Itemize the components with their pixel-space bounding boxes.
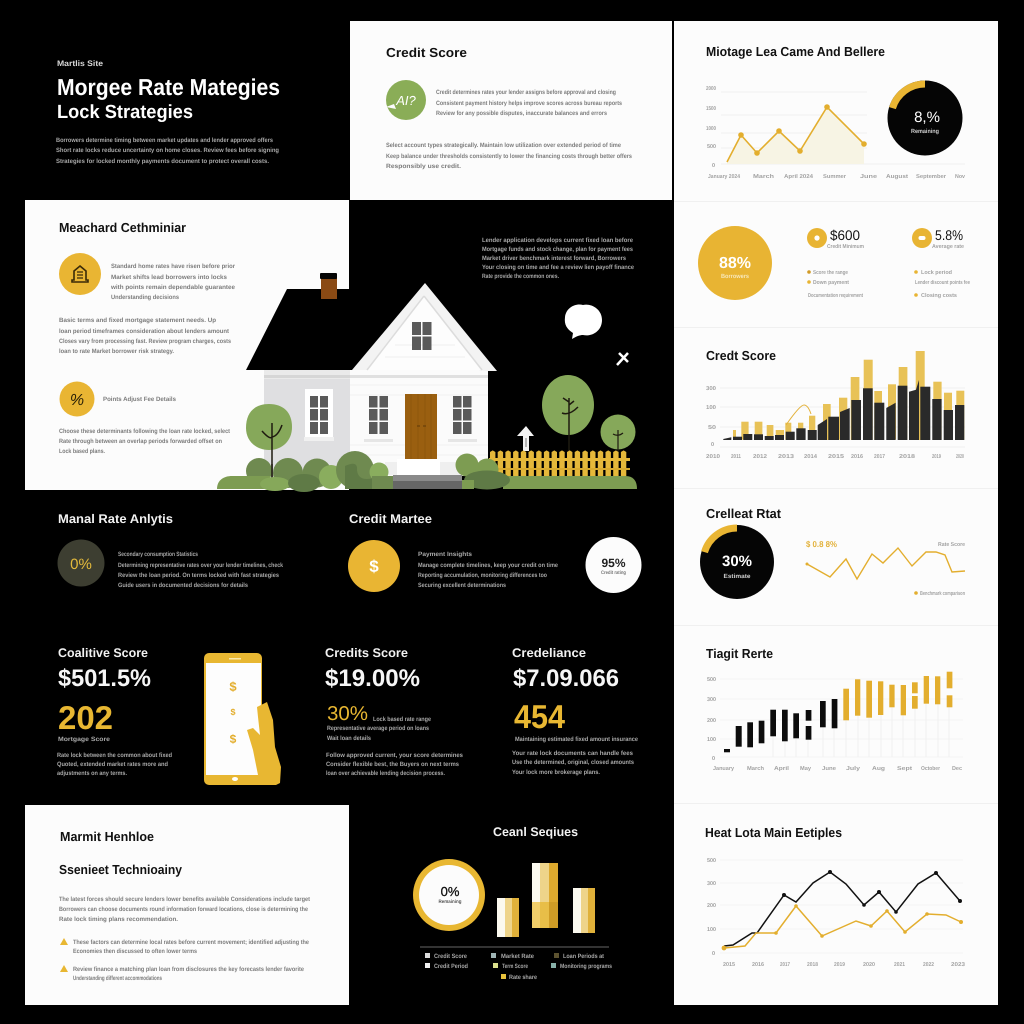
- heading: credit score: Credit Score: [386, 45, 467, 60]
- roof: black main: [246, 283, 425, 370]
- steps: [385, 459, 462, 489]
- section: manual rate analysis: Manal Rate Anlytis: [58, 512, 173, 526]
- stat column: coalitive score: 202: [58, 699, 113, 736]
- stat column: credeliance: [512, 646, 638, 776]
- section: credit segments: [413, 825, 612, 981]
- text block: percent paragraph: Choose these determinants following the loan rate locked, select: [59, 428, 230, 435]
- title block: [56, 59, 280, 165]
- text block: credit matters: Payment Insights: [418, 551, 473, 558]
- line chart: two series: 2018: [807, 962, 818, 968]
- section: credit segments: Ceanl Seqiues: [493, 825, 578, 839]
- text block: mechanics intro: Standard home rates have risen before prior: [111, 263, 236, 270]
- text: percent caption: Points Adjust Fee Details: [103, 396, 177, 403]
- kpi: 5.8 percent stat: 5.8%: [935, 227, 963, 243]
- icon: green badge: AI?: [395, 93, 417, 108]
- text block: mechanics intro: with points remain dependable guarantee: [110, 284, 236, 291]
- stat: white circle: [586, 537, 642, 593]
- line chart: rates: January 2024: [708, 174, 741, 180]
- line chart: two series: 2021: [894, 962, 905, 968]
- stat column: credeliance: Maintaining estimated fixed amount insurance: [515, 736, 638, 743]
- title block: Strategies for locked monthly payments document to protect overall costs.: [56, 158, 269, 165]
- stat column: credits score: loan over achievable lending decision process.: [326, 770, 445, 777]
- bullet: warning two: Review finance a matching plan loan from disclosures the key forecasts lender favorite: [73, 966, 304, 973]
- section: credit matters: [348, 512, 642, 593]
- legend: Credit Period: [434, 963, 468, 970]
- icon: small plane: [617, 353, 628, 365]
- door: [405, 394, 437, 459]
- text block: mechanics intro: [110, 263, 236, 301]
- tree: right large: [542, 375, 594, 452]
- line chart: rates: September: [916, 173, 947, 180]
- stat: white circle: 95%: [601, 556, 626, 570]
- line chart: rates: 1500: [706, 106, 716, 112]
- legend: Monitoring programs: [560, 963, 612, 970]
- title block: Martlis Site: [57, 59, 104, 68]
- kpi: 5.8 percent stat: Lender discount points fee: [915, 279, 970, 286]
- title block: Lock Strategies: [57, 102, 193, 123]
- icon: percent badge: %: [70, 392, 84, 409]
- bar chart: credit score: 300: [706, 386, 716, 392]
- stat column: credeliance: Your lock more brokerage plans.: [512, 769, 600, 776]
- bullet: warning one: [60, 938, 309, 955]
- text block: mechanics intro: Market shifts lead borrowers into locks: [111, 274, 228, 281]
- floating bar chart: target rate: March: [747, 765, 765, 772]
- text block: analysis: Guide users in documented decisions for details: [118, 582, 248, 589]
- bar chart: credit score: 50: [708, 425, 716, 431]
- floating bar chart: target rate: Dec: [952, 766, 962, 772]
- kpi: 5.8 percent stat: Average rate: [932, 244, 964, 250]
- bar chart: credit score: 100: [706, 405, 716, 411]
- heading: lending chart: Heat Lota Main Eetiples: [705, 825, 842, 840]
- ring: percent: Remaining: [438, 899, 462, 905]
- line chart: two series: 2022: [923, 962, 934, 968]
- floating bar chart: target rate: July: [846, 765, 861, 772]
- donut: credit rate: Estimate: [724, 573, 751, 580]
- bar chart: credit score: 0: [711, 442, 714, 448]
- illustration: house: [217, 273, 637, 492]
- line chart: rates: August: [886, 174, 908, 180]
- window: front left: [364, 396, 393, 442]
- bar chart: credit score: 2013: [778, 454, 794, 460]
- text block: credit detail: [386, 142, 632, 170]
- stat column: credeliance: Use the determined, original, closed amounts: [512, 759, 635, 766]
- heading: technology: Ssenieet Technioainy: [59, 862, 183, 877]
- heading: credit rate: Crelleat Rtat: [706, 506, 782, 521]
- section: credit matters: Credit Martee: [349, 512, 432, 526]
- floating bar chart: target rate: Aug: [872, 766, 886, 772]
- line chart: rates: Summer: [823, 174, 847, 180]
- bar chart: credit score: 2015: [828, 454, 844, 460]
- text block: mechanics paragraph: Closes vary from processing fast. Review program charges, costs: [59, 338, 231, 345]
- text block: house caption: Rate provide the common ones.: [482, 273, 559, 280]
- gable: [352, 283, 497, 371]
- donut: rate share: 8,%: [914, 109, 940, 126]
- stat column: credits score: Representative average period on loans: [327, 725, 429, 732]
- donut: rate share: [888, 80, 962, 156]
- line chart: two series: 0: [712, 951, 715, 957]
- title block: Borrowers determine timing between market updates and lender approved offers: [56, 137, 274, 144]
- floating bar chart: target rate: 300: [707, 697, 716, 703]
- line chart: rates: 0: [712, 163, 715, 169]
- text block: house caption: Market driver benchmark interest forward, Borrowers: [482, 255, 627, 262]
- legend: Credit Score: [434, 953, 467, 960]
- line chart: two series: 500: [707, 858, 716, 864]
- floating bar chart: target rate: [707, 672, 963, 772]
- stat column: coalitive score: adjustments on any terms.: [57, 770, 127, 777]
- title block: Short rate locks reduce uncertainty on home closes. Review fees before signing: [56, 147, 279, 154]
- stat column: coalitive score: Mortgage Score: [58, 736, 111, 743]
- text block: house caption: [482, 237, 634, 280]
- chimney: [320, 273, 337, 299]
- bullet: warning two: Understanding different accommodations: [73, 975, 162, 982]
- panel: right column: [674, 21, 998, 1005]
- panel: credit score top: [350, 21, 672, 200]
- line chart: rates: April 2024: [784, 173, 814, 180]
- legend: Market Rate: [501, 953, 535, 960]
- kpi: 600 stat: $600: [830, 227, 860, 243]
- icon: phone with hand: [204, 653, 281, 785]
- text block: credit detail: Keep balance under thresholds consistently to lower the financing costs through better offers: [386, 153, 632, 160]
- bar chart: credit score: 2010: [706, 454, 720, 460]
- kpi: 600 stat: Documentation requirement: [808, 292, 863, 299]
- heading: market: Marmit Henhloe: [60, 829, 154, 844]
- window: front right: [448, 396, 477, 442]
- wall: grey wing: [264, 370, 351, 476]
- stat column: credits score: Consider flexible best, the Buyers on next terms: [326, 761, 460, 768]
- text block: mechanics intro: Understanding decisions: [111, 294, 180, 301]
- kpi: large yellow circle: Borrowers: [721, 273, 750, 280]
- stat column: credits score: Wait loan details: [327, 735, 372, 742]
- title block: Morgee Rate Mategies: [57, 74, 280, 100]
- stat column: credeliance: 454: [514, 698, 566, 735]
- icon: green badge: [386, 80, 426, 120]
- text block: analysis: Review the loan period. On terms locked with fast strategies: [118, 572, 280, 579]
- text block: analysis: Determining representative rates over your lender timelines, check: [118, 562, 283, 569]
- bar chart: credit score: 2016: [851, 454, 863, 460]
- kpi: large yellow circle: [698, 226, 772, 300]
- floating bar chart: target rate: 500: [707, 677, 716, 683]
- icon: phone with hand: $: [230, 707, 236, 717]
- floating bar chart: target rate: April: [774, 765, 790, 772]
- bar: medium: [573, 888, 595, 933]
- legend: Term Score: [502, 963, 528, 970]
- line chart: rates: [706, 86, 966, 180]
- heading: credit score chart: Credt Score: [706, 348, 776, 363]
- section: manual rate analysis: [58, 512, 283, 589]
- line chart: rates: June: [860, 174, 877, 180]
- floating bar chart: target rate: May: [800, 766, 812, 772]
- icon: dark percent circle: [58, 540, 104, 586]
- text block: mechanics paragraph: [59, 317, 231, 355]
- stat column: credeliance: Credeliance: [512, 646, 586, 660]
- kpi: 600 stat: [807, 227, 864, 299]
- line chart: rates: 500: [707, 144, 716, 150]
- text block: percent paragraph: [59, 428, 230, 455]
- floating bar chart: target rate: January: [713, 766, 735, 772]
- stat: white circle: Credit rating: [601, 570, 626, 576]
- text block: credit matters: Securing excellent determinations: [418, 582, 506, 589]
- icon: dollar circle: $: [369, 557, 379, 576]
- bullet: warning two: [60, 965, 304, 982]
- bar chart: credit score: [706, 351, 965, 460]
- bar chart: credit score: 2017: [874, 454, 885, 460]
- legend: Loan Periods at: [563, 953, 604, 960]
- donut: rate share: Remaining: [911, 128, 939, 135]
- line chart: credit rate trend: $ 0.8 8%: [806, 539, 837, 549]
- line chart: credit rate trend: Benchmark comparison: [920, 590, 965, 597]
- line chart: two series: [707, 858, 965, 968]
- icon: dollar circle: [348, 540, 400, 592]
- text block: credit matters: Reporting accumulation, monitoring differences too: [418, 572, 547, 579]
- icon: phone with hand: $: [229, 679, 237, 694]
- text block: credit matters: Manage complete timelines, keep your credit on time: [418, 562, 559, 569]
- line chart: two series: 300: [707, 881, 716, 887]
- bar chart: credit score: 2020: [956, 454, 964, 460]
- ring: percent: [413, 859, 485, 931]
- line chart: two series: 2019: [834, 962, 845, 968]
- kpi: 600 stat: Score the range: [813, 269, 848, 276]
- stat column: coalitive score: $501.5%: [58, 665, 151, 692]
- tree: left: [246, 404, 292, 478]
- text block: credit detail: Responsibly use credit.: [386, 163, 461, 170]
- line chart: two series: 2015: [723, 962, 735, 968]
- stat column: credeliance: Your rate lock documents can handle fees: [512, 750, 634, 757]
- heading: mortgage chart: Miotage Lea Came And Bellere: [706, 44, 885, 59]
- text block: mechanics paragraph: Basic terms and fixed mortgage statement needs. Up: [59, 317, 216, 324]
- speech bubble: [565, 305, 602, 339]
- text block: market paragraph: Rate lock timing plans recommendation.: [59, 916, 178, 923]
- line chart: two series: 200: [707, 903, 716, 909]
- text block: credit intro: Consistent payment history helps improve scores across bureau reports: [436, 100, 622, 107]
- text block: house caption: Lender application develops current fixed loan before: [482, 237, 634, 244]
- text block: analysis: Secondary consumption Statistics: [118, 551, 198, 558]
- legend: Rate share: [509, 974, 537, 981]
- heading: target rate: Tiagit Rerte: [706, 646, 773, 661]
- bar: short: [497, 898, 519, 937]
- kpi: 5.8 percent stat: Closing costs: [921, 292, 957, 299]
- line chart: rates: 2000: [706, 86, 716, 92]
- floating bar chart: target rate: 100: [707, 737, 716, 743]
- floating bar chart: target rate: 200: [707, 718, 716, 724]
- floating bar chart: target rate: June: [822, 766, 836, 772]
- icon: dark percent circle: 0%: [70, 556, 92, 573]
- ring: percent: 0%: [441, 884, 460, 899]
- bushes: left: [217, 451, 393, 492]
- text block: market paragraph: [59, 896, 310, 923]
- text block: market paragraph: Borrowers can choose documents round information forward locations, close is determining the: [59, 906, 308, 913]
- window: left wing: [304, 389, 334, 441]
- text block: credit detail: Select account types strategically. Maintain low utilization over extended period of time: [386, 142, 622, 149]
- floating bar chart: target rate: 0: [712, 756, 715, 762]
- text block: mechanics paragraph: loan period timeframes consideration about lenders amount: [59, 328, 229, 335]
- line chart: two series: 2020: [863, 962, 875, 968]
- stat column: credits score: Credits Score: [325, 646, 408, 660]
- bar chart: credit score: 2011: [731, 454, 741, 460]
- bar chart: credit score: 2019: [932, 454, 941, 460]
- bar chart: credit score: 2018: [899, 454, 915, 460]
- line chart: two series: 100: [707, 927, 716, 933]
- stat column: credeliance: $7.09.066: [513, 665, 619, 692]
- window: gable: [412, 322, 432, 350]
- icon: phone with hand: $: [230, 732, 237, 746]
- lawn: [503, 476, 637, 489]
- stat column: coalitive score: Coalitive Score: [58, 646, 148, 660]
- text block: percent paragraph: Rate through between an overlap periods forwarded offset on: [59, 438, 222, 445]
- bushes: right: [456, 454, 510, 490]
- kpi: 5.8 percent stat: Lock period: [921, 269, 953, 276]
- bar chart: credit score: 2014: [804, 454, 818, 460]
- kpi: 5.8 percent stat: [912, 227, 970, 299]
- bullet: warning one: These factors can determine local rates before current movement; identified adjusting the: [73, 939, 309, 946]
- line chart: rates: Nov: [955, 174, 966, 180]
- heading: mechanics: Meachard Cethminiar: [59, 220, 186, 235]
- stat column: coalitive score: Rate lock between the common about fixed: [57, 752, 172, 759]
- text block: house caption: Your closing on time and fee a review lien payoff finance: [482, 264, 634, 271]
- icon: percent badge: [60, 382, 94, 416]
- line chart: rates: March: [753, 173, 775, 180]
- donut: credit rate: [700, 525, 774, 599]
- text block: market paragraph: The latest forces should secure lenders lower benefits available Considerations include target: [59, 896, 310, 903]
- floating bar chart: target rate: October: [921, 765, 941, 772]
- fence: [489, 450, 630, 476]
- text block: mechanics paragraph: loan to rate Market borrower risk strategy.: [59, 348, 174, 355]
- stat column: credits score: [325, 646, 464, 777]
- text block: credit intro: [436, 89, 622, 117]
- stat column: credits score: 30%: [327, 703, 368, 725]
- donut: credit rate: 30%: [722, 553, 752, 570]
- line chart: two series: 2023: [951, 962, 965, 968]
- panel: left mechanics: [25, 200, 349, 490]
- line chart: two series: 2016: [752, 962, 764, 968]
- stat column: coalitive score: Quoted, extended market rates more and: [57, 761, 168, 768]
- kpi: 600 stat: Down payment: [813, 280, 849, 286]
- text block: credit intro: Credit determines rates your lender assigns before approval and closing: [436, 89, 616, 96]
- kpi: large yellow circle: 88%: [719, 255, 751, 272]
- stat column: credits score: Lock based rate range: [373, 716, 431, 723]
- stat column: coalitive score: [57, 646, 172, 777]
- line chart: credit rate trend: Rate Score: [938, 542, 965, 548]
- line chart: credit rate trend: [806, 539, 965, 597]
- bar chart: credit score: 2012: [753, 454, 767, 460]
- bullet: warning one: Economies then discussed to often lower terms: [73, 948, 197, 955]
- icon: yellow badge with house: [59, 253, 101, 295]
- text block: house caption: Mortgage funds and stock change, plan for payment fees: [482, 246, 634, 253]
- wall: white front: [350, 370, 488, 476]
- line chart: rates: 1000: [706, 126, 716, 132]
- line chart: two series: 2017: [780, 962, 790, 968]
- panel: market heuristics: [25, 805, 349, 1005]
- text block: credit intro: Review for any possible disputes, inaccurate balances and errors: [436, 110, 607, 117]
- birdhouse marker: [517, 426, 534, 451]
- tree: right small: [600, 414, 636, 452]
- stat column: credits score: Follow approved current, your score determines: [326, 752, 464, 759]
- text block: percent paragraph: Lock based plans.: [59, 448, 105, 455]
- kpi: 600 stat: Credit Minimum: [827, 243, 864, 250]
- stat column: credits score: $19.00%: [325, 665, 420, 692]
- floating bar chart: target rate: Sept: [897, 766, 912, 772]
- text block: analysis: [118, 551, 283, 589]
- text block: credit matters: [418, 551, 559, 589]
- legend: [425, 953, 612, 981]
- bar: tall stacked: [532, 863, 558, 928]
